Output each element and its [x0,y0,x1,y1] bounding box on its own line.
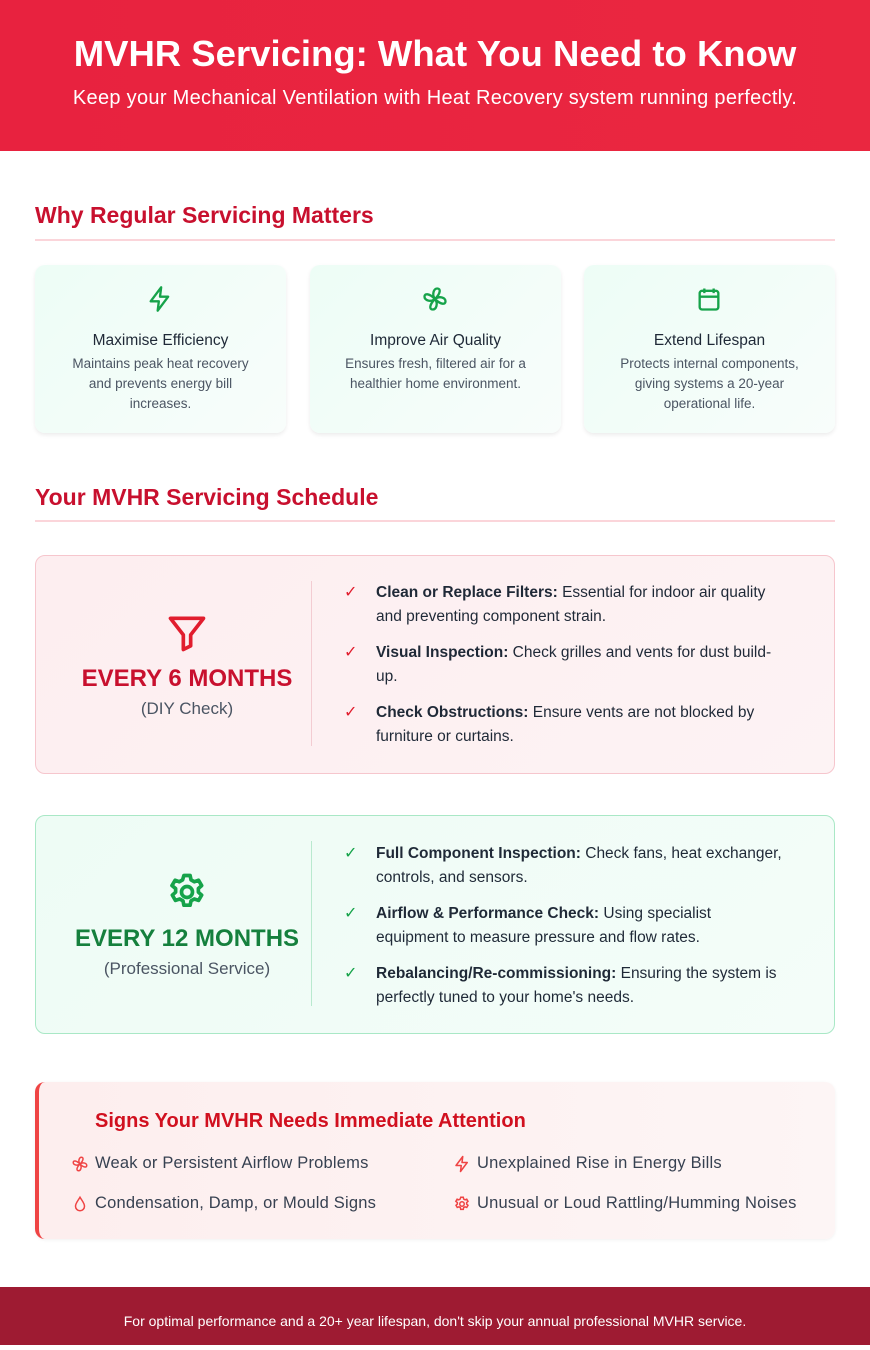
panel: every 12 months: perfectly tuned to your home's needs. [376,989,634,1006]
panel: every 6 months: furniture or curtains. [376,728,514,745]
card: lifespan [584,265,835,433]
panel: every 12 months: Airflow & Performance Check: Using specialist [376,905,711,922]
subtitle: Keep your Mechanical Ventilation with Heat Recovery system running perfectly. [73,87,797,109]
panel: every 6 months: (DIY Check) [141,699,233,718]
sign: condensation: Condensation, Damp, or Mould Signs [95,1194,376,1212]
checklist items: controls, and sensors. [376,869,528,886]
card: air quality: Improve Air Quality [370,332,501,349]
panel: every 12 months [35,815,835,1034]
panel: every 12 months: ✓ [344,965,357,982]
heading: signs: Signs Your MVHR Needs Immediate Attention [95,1110,526,1132]
card: air quality: Ensures fresh, filtered air for a healthier home environment. [345,356,526,391]
panel: warning signs [35,1082,835,1239]
panel: every 6 months: up. [376,668,398,685]
label: every 6 months: EVERY 6 MONTHS [82,665,292,692]
footer [0,1287,870,1345]
icon: filter [168,616,206,652]
checklist items [344,584,766,625]
checklist items: Clean or Replace Filters: Essential for indoor air quality [376,584,765,601]
card: efficiency [35,265,286,433]
icon: bolt [150,286,170,312]
card: efficiency: Maintains peak heat recovery and prevents energy bill increases. [72,356,249,411]
sign: noises: Unusual or Loud Rattling/Humming Noises [477,1194,797,1212]
checklist items: and preventing component strain. [376,608,606,625]
icon: gear [170,874,204,907]
heading: schedule: Your MVHR Servicing Schedule [35,484,378,510]
title: MVHR Servicing: What You Need to Know [74,33,796,74]
sign: energy bills: Unexplained Rise in Energy Bills [477,1154,722,1172]
panel: every 12 months: ✓ [344,845,357,862]
panel: every 6 months: ✓ [344,584,357,601]
panel: every 12 months: (Professional Service) [104,959,270,978]
panel: every 6 months: Visual Inspection: Check grilles and vents for dust build- [376,644,771,661]
panel: every 6 months: ✓ [344,644,357,661]
footer: For optimal performance and a 20+ year lifespan, don't skip your annual professional MVHR service. [124,1313,746,1329]
panel: every 12 months: equipment to measure pressure and flow rates. [376,929,700,946]
sign: airflow: Weak or Persistent Airflow Problems [95,1154,369,1172]
card: lifespan: Protects internal components, giving systems a 20-year operational life. [620,356,799,411]
heading: why servicing matters: Why Regular Servicing Matters [35,202,374,228]
panel: every 12 months: Rebalancing/Re-commissioning: Ensuring the system is [376,965,777,982]
header [0,0,870,151]
card: lifespan: Extend Lifespan [654,332,765,349]
panel: every 12 months: ✓ [344,905,357,922]
icon: fan [423,287,447,311]
checklist items: Full Component Inspection: Check fans, heat exchanger, [376,845,782,862]
card: air quality [310,265,561,433]
label: every 12 months: EVERY 12 MONTHS [75,925,299,952]
icon: calendar [698,288,720,311]
checklist items [344,845,782,886]
panel: every 6 months [35,555,835,774]
card: efficiency: Maximise Efficiency [93,332,228,349]
panel: every 6 months: Check Obstructions: Ensure vents are not blocked by [376,704,754,721]
panel: every 6 months: ✓ [344,704,357,721]
